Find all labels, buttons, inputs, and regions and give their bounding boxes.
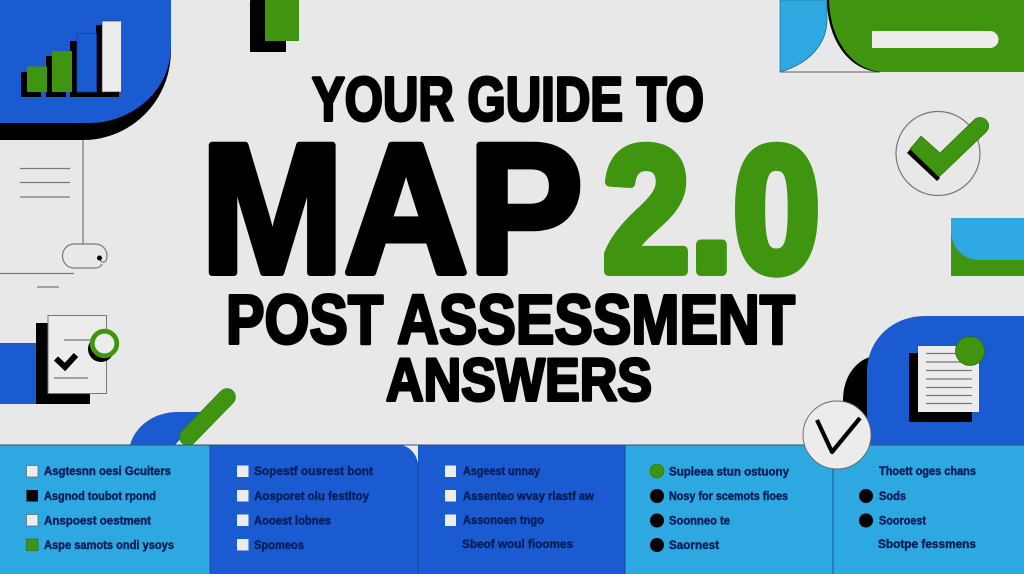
column 3 checklist: Sbeof woul fioomes [462, 539, 573, 551]
heading: answers: ANSWERS [386, 346, 652, 414]
icon: top green tab [250, 0, 299, 52]
heading: your guide to: YOUR GUIDE TO [312, 66, 704, 134]
column 3 checklist: Assonoen tngo [463, 515, 544, 527]
heading: post assessment: POST ASSESSMENT [226, 280, 795, 358]
column 5 bullet list: Thoett oges chans [879, 466, 976, 478]
icon: blue hump with green bar [130, 397, 227, 445]
column 3 checklist: Asgeest unnay [463, 466, 541, 478]
icon: green check in circle [896, 112, 989, 196]
column 2 checklist [237, 466, 373, 552]
column 2 checklist: Aosporet olu festltoy [254, 491, 370, 503]
panel: lower-right document badge [843, 316, 1024, 445]
icon: document with green dot [909, 336, 984, 422]
column 5 bullet list: Sbotpe fessmens [878, 539, 976, 551]
icon: white pill bar [872, 31, 998, 48]
column 5 bullet list: Sooroest [879, 516, 926, 528]
column 5 bullet list [859, 466, 976, 551]
column 4 bullet list: Nosy for scemots fioes [669, 491, 788, 503]
icon: right blue and green tab [951, 218, 1024, 276]
column 1 checklist: Asgtesnn oesi Gcuiters [44, 466, 171, 478]
icon: bar chart [21, 21, 122, 97]
column 2 checklist: Aooest lobnes [254, 516, 331, 528]
column 4 bullet list: Supleea stun ostuony [669, 466, 790, 478]
column 4 bullet list: Soonneo te [669, 516, 730, 528]
column 2 checklist: Sopestf ousrest bont [254, 466, 373, 478]
column 1 checklist [26, 466, 174, 552]
heading: map: MAP [200, 106, 583, 312]
column 1 checklist: Anspoest oestment [44, 516, 151, 528]
column 1 checklist: Aspe samots ondi ysoys [44, 540, 174, 552]
column 5 bullet list: Sods [879, 491, 906, 503]
column 4 bullet list [650, 464, 790, 552]
panel: top-right tabs [780, 0, 1024, 72]
column 2 checklist: Spomeos [254, 540, 304, 552]
title [200, 66, 820, 414]
panel: top-left chart badge [0, 0, 171, 140]
panel: bottom strip [0, 445, 1024, 574]
column 4 bullet list: Saornest [669, 540, 719, 552]
column 3 checklist: Assenteo wvay rlastf aw [463, 491, 594, 503]
icon: checklist document [0, 316, 117, 404]
icon: note with connector line [0, 140, 107, 287]
icon: black check in white circle [803, 401, 871, 469]
column 3 checklist [445, 466, 594, 551]
heading: 2.0: 2.0 [603, 110, 820, 309]
column 1 checklist: Asgnod toubot rpond [44, 491, 156, 503]
